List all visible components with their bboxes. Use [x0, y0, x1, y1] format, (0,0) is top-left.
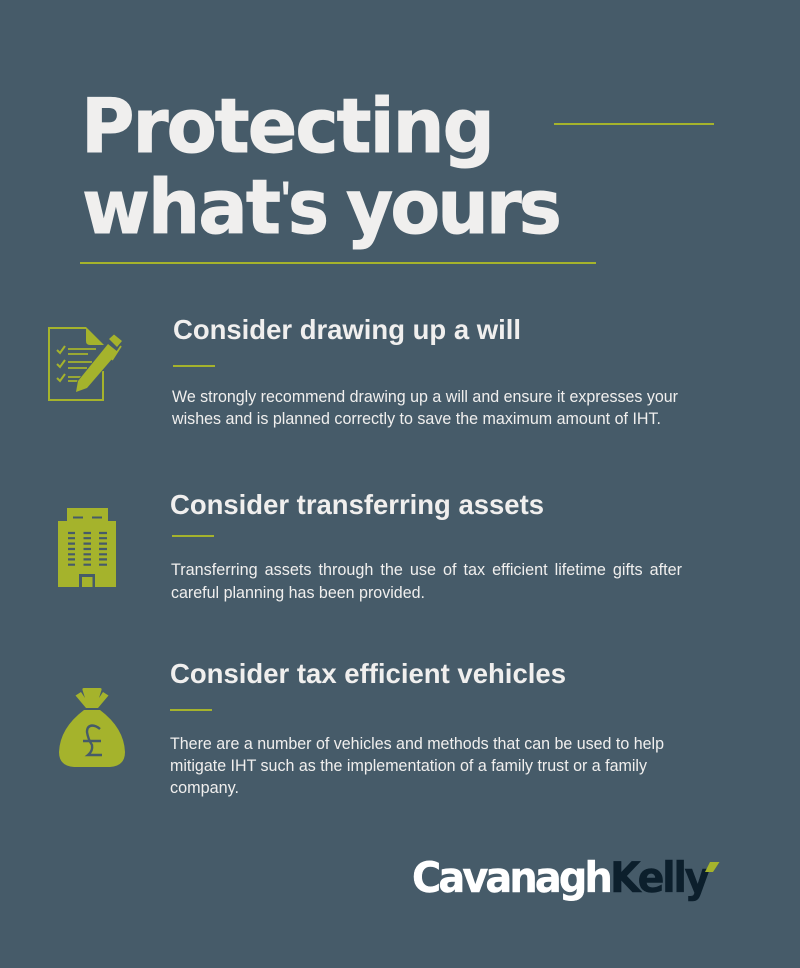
- panel: transferring assets: [58, 489, 682, 602]
- text: transferring assets: Transferring assets through the use of tax efficient lifetime gifts after: [171, 561, 682, 579]
- text: will: [171, 388, 679, 428]
- accent: will: [173, 365, 215, 367]
- title: ': [280, 169, 291, 236]
- panel: will: [49, 314, 679, 428]
- logo: Cavanagh: [412, 853, 610, 902]
- heading: will: Consider drawing up a will: [173, 314, 521, 345]
- text: tax efficient vehicles: company.: [170, 779, 239, 797]
- accent: transferring assets: [172, 535, 214, 537]
- text: transferring assets: [171, 559, 682, 602]
- text: transferring assets: careful planning has been provided.: [171, 584, 425, 602]
- logo: [412, 853, 720, 902]
- text: will: We strongly recommend drawing up a will and ensure it expresses your: [172, 388, 679, 406]
- icon: document and pen: [49, 327, 122, 400]
- title underline: [80, 262, 596, 264]
- heading: tax efficient vehicles: Consider tax efficient vehicles: [170, 658, 566, 689]
- text: will: wishes and is planned correctly to save the maximum amount of IHT.: [171, 410, 661, 428]
- title accent line: [554, 123, 714, 125]
- text: tax efficient vehicles: mitigate IHT such as the implementation of a family trust or a family: [170, 757, 648, 775]
- title: yours: [346, 163, 559, 251]
- icon: office building: [58, 508, 116, 587]
- heading: transferring assets: Consider transferring assets: [170, 489, 544, 520]
- accent: tax efficient vehicles: [170, 709, 212, 711]
- icon: money bag: [59, 688, 125, 767]
- title: s: [288, 163, 329, 251]
- title: Protecting: [81, 82, 493, 170]
- text: tax efficient vehicles: There are a number of vehicles and methods that can be used to help: [170, 735, 664, 753]
- title: what: [82, 163, 280, 251]
- logo accent: [705, 862, 720, 872]
- text: tax efficient vehicles: [170, 735, 664, 797]
- title: [81, 82, 559, 251]
- logo: Kelly: [610, 853, 710, 902]
- panel: tax efficient vehicles: [59, 658, 664, 797]
